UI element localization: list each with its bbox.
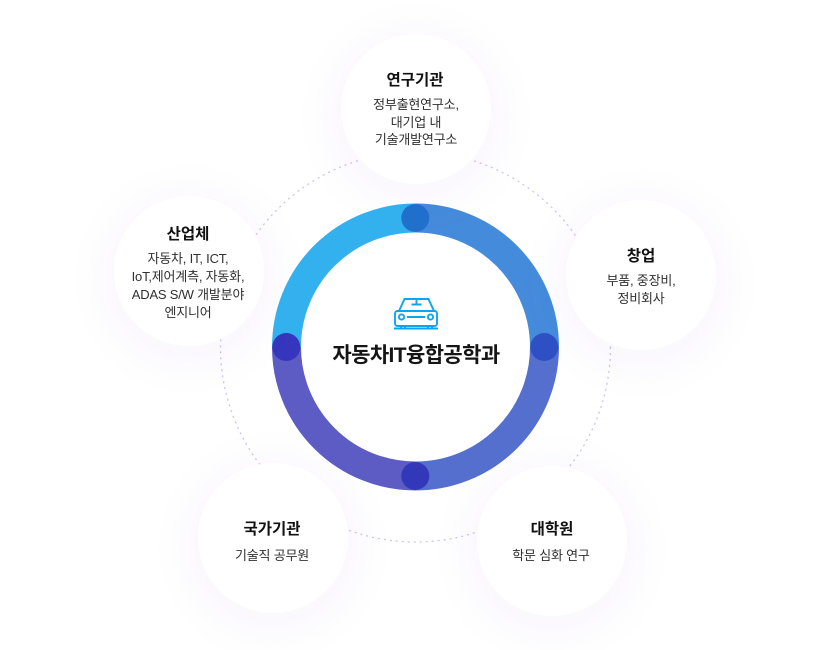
panel: 창업 <box>566 200 716 350</box>
text: 산업체 details: 엔지니어 <box>164 305 212 320</box>
heading: 연구기관: 연구기관 <box>386 71 444 89</box>
text: 연구기관 details: 기술개발연구소 <box>375 132 457 147</box>
dotted orbit ring <box>220 152 610 542</box>
ring node: bottom <box>401 462 429 490</box>
panel: 국가기관 <box>198 463 348 613</box>
heading: 국가기관: 국가기관 <box>243 520 301 538</box>
ring node: right <box>530 333 558 361</box>
text: 연구기관 details: 대기업 내 <box>391 115 441 130</box>
icon: car <box>394 299 438 328</box>
text: 창업 details: 정비회사 <box>617 291 665 306</box>
text: 산업체 details: IoT,제어계측, 자동화, <box>132 269 244 284</box>
panel: 대학원 <box>477 466 627 616</box>
panel: 산업체 <box>114 196 264 346</box>
heading: 산업체: 산업체 <box>167 225 209 243</box>
text: 국가기관 details: 기술직 공무원 <box>235 548 309 563</box>
text: 산업체 details: ADAS S/W 개발분야 <box>132 287 244 302</box>
text: 창업 details: 부품, 중장비, <box>606 273 676 288</box>
text: 연구기관 details: 정부출현연구소, <box>373 97 459 112</box>
center title: 자동차IT융합공학과 <box>332 344 500 367</box>
central ring <box>272 204 558 490</box>
panel: 연구기관 <box>341 34 491 184</box>
ring node: left <box>272 333 300 361</box>
text: 대학원 details: 학문 심화 연구 <box>512 548 590 563</box>
ring node: top <box>401 204 429 232</box>
heading: 창업: 창업 <box>627 247 655 265</box>
heading: 대학원: 대학원 <box>531 520 573 538</box>
text: 산업체 details: 자동차, IT, ICT, <box>148 251 228 266</box>
